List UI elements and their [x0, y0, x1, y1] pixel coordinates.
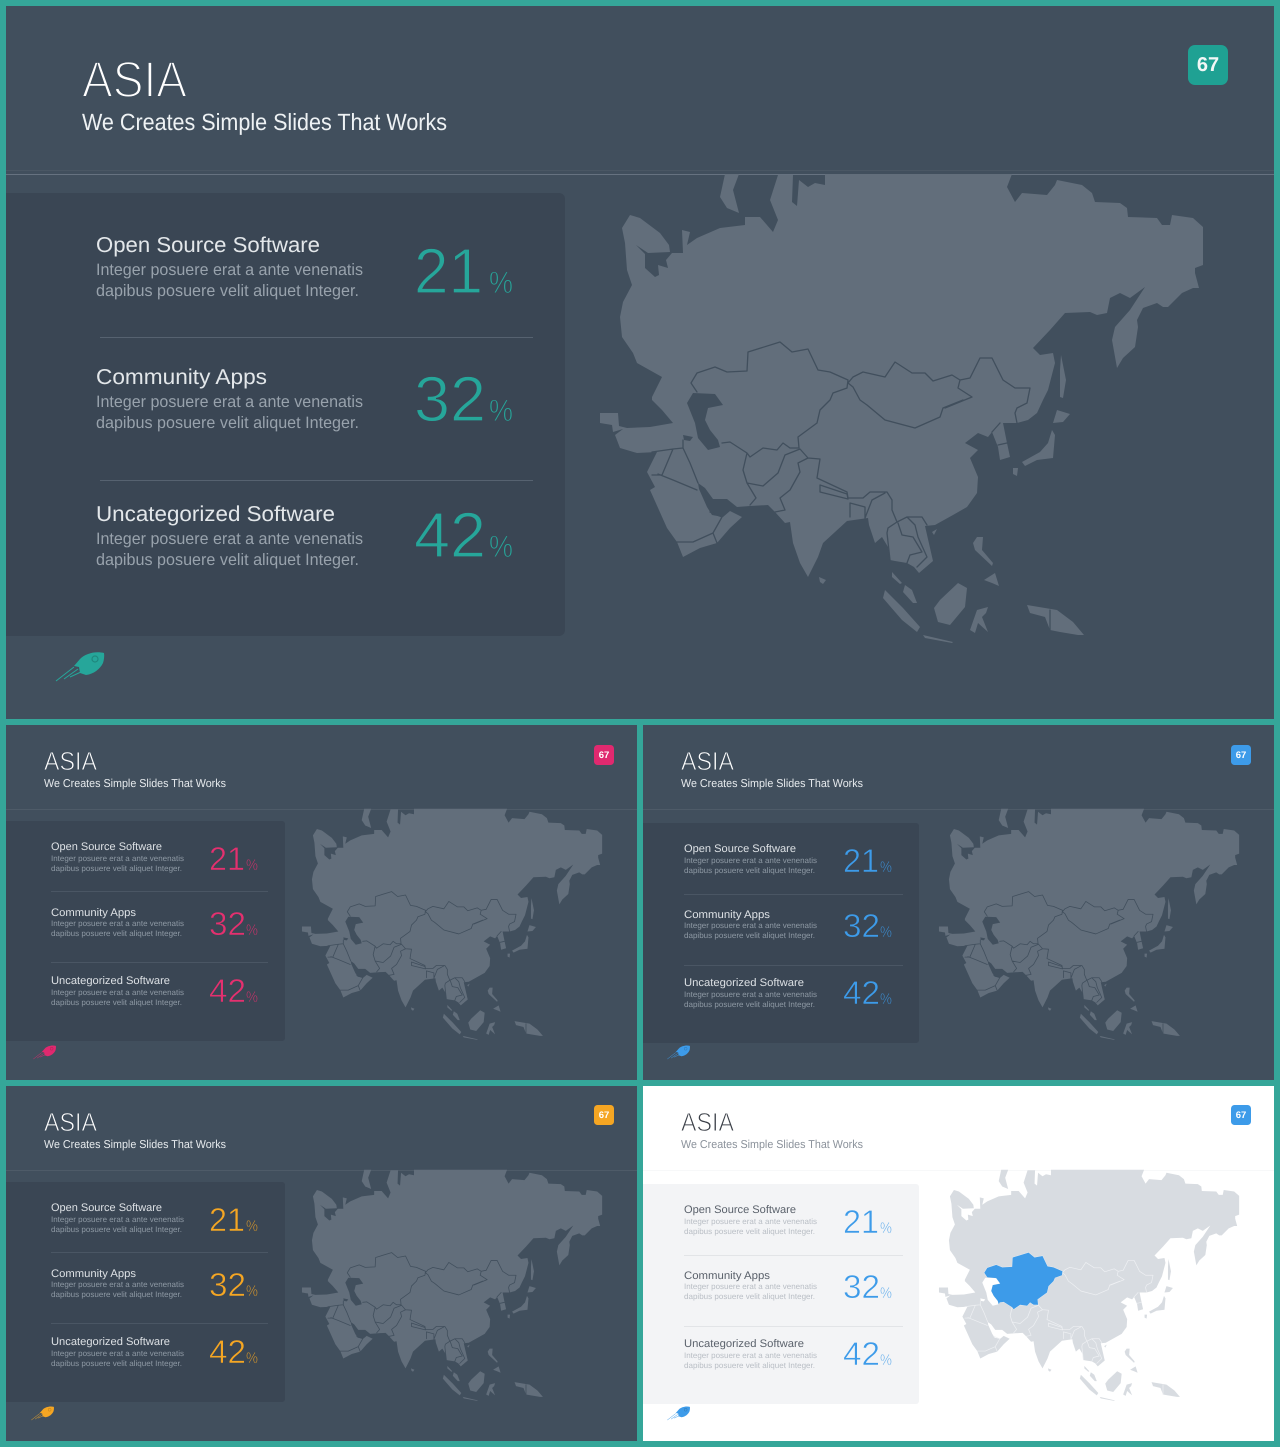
row: open source software — [96, 233, 513, 307]
row: uncategorized software: Uncategorized Software — [96, 502, 335, 526]
row: uncategorized software: 42 — [209, 972, 246, 1009]
row: open source software: % — [880, 859, 892, 876]
page number badge — [594, 745, 614, 765]
map of Asia — [600, 174, 1203, 643]
panel: statistics — [6, 193, 565, 636]
row: open source software: % — [489, 265, 513, 300]
row: uncategorized software: % — [489, 529, 513, 564]
row: community apps: % — [246, 922, 258, 939]
row: open source software — [51, 840, 258, 877]
slide: main teal background — [6, 6, 1274, 719]
slide: amber variant — [6, 1086, 637, 1441]
row: community apps: 32 — [843, 1268, 880, 1305]
row: community apps: % — [489, 393, 513, 428]
row: community apps: Community Apps — [51, 1268, 136, 1280]
row: open source software: Open Source Software — [684, 843, 796, 855]
row: uncategorized software: 42 — [843, 1335, 880, 1372]
row: uncategorized software: % — [246, 1350, 258, 1367]
row: community apps — [684, 907, 892, 944]
row: uncategorized software — [684, 1335, 892, 1372]
row: open source software: Integer posuere erat a ante venenatis — [684, 856, 817, 865]
row: uncategorized software: 42 — [843, 974, 880, 1011]
icon: rocket — [31, 1407, 54, 1420]
row: open source software: Integer posuere erat a ante venenatis — [51, 854, 184, 863]
row: open source software: Integer posuere erat a ante venenatis — [51, 1215, 184, 1224]
slide: light variant — [643, 1086, 1274, 1441]
row: open source software — [684, 1203, 892, 1240]
row: open source software: % — [246, 857, 258, 874]
row: community apps — [51, 905, 258, 942]
map of Asia with highlighted Central Asia — [939, 1170, 1239, 1401]
row: uncategorized software: Uncategorized Software — [51, 1336, 170, 1348]
row: uncategorized software: Uncategorized Software — [684, 1338, 804, 1350]
row: open source software: Integer posuere erat a ante venenatis — [96, 261, 363, 279]
row: uncategorized software: Uncategorized Software — [51, 975, 170, 987]
page number badge — [594, 1105, 614, 1125]
row: community apps: Community Apps — [684, 1270, 771, 1282]
row: open source software: dapibus posuere velit aliquet Integer. — [96, 282, 359, 300]
row: open source software: 21 — [843, 842, 879, 879]
row: uncategorized software: dapibus posuere velit aliquet Integer. — [96, 551, 359, 569]
map of Asia — [302, 809, 602, 1040]
row: uncategorized software: 42 — [209, 1333, 246, 1370]
row: community apps: % — [246, 1283, 258, 1300]
row: community apps: Integer posuere erat a ante venenatis — [96, 393, 363, 411]
subtitle: We Creates Simple Slides That Works — [82, 109, 447, 135]
highlighted region — [984, 1253, 1062, 1309]
row: uncategorized software: dapibus posuere velit aliquet Integer. — [51, 998, 182, 1007]
row: open source software: 21 — [209, 1201, 245, 1238]
row: community apps: Community Apps — [96, 365, 267, 389]
row: community apps — [51, 1266, 258, 1303]
title: ASIA — [681, 746, 735, 776]
subtitle: We Creates Simple Slides That Works — [681, 1139, 863, 1151]
row: open source software: % — [880, 1220, 892, 1237]
row: uncategorized software: dapibus posuere velit aliquet Integer. — [684, 1000, 815, 1009]
row: uncategorized software: dapibus posuere velit aliquet Integer. — [684, 1361, 815, 1370]
page number badge — [1188, 45, 1228, 85]
row: community apps: dapibus posuere velit aliquet Integer. — [684, 931, 815, 940]
page number badge: 67 — [1236, 1110, 1246, 1121]
row: uncategorized software: Uncategorized Software — [684, 977, 804, 989]
subtitle: We Creates Simple Slides That Works — [44, 1139, 226, 1151]
icon: rocket — [33, 1046, 56, 1059]
subtitle: We Creates Simple Slides That Works — [681, 778, 863, 790]
slide: blue variant — [643, 725, 1274, 1080]
row: community apps: dapibus posuere velit aliquet Integer. — [684, 1292, 815, 1301]
row: community apps: 32 — [414, 363, 486, 435]
row: open source software: dapibus posuere velit aliquet Integer. — [684, 866, 815, 875]
title: ASIA — [82, 51, 187, 108]
icon: rocket — [56, 652, 104, 681]
map of Asia — [302, 1170, 602, 1401]
row: open source software: Open Source Software — [684, 1204, 796, 1216]
row: uncategorized software: % — [246, 989, 258, 1006]
panel: statistics — [643, 823, 919, 1043]
row: community apps: Integer posuere erat a ante venenatis — [684, 1282, 817, 1291]
row: open source software: Open Source Software — [96, 233, 320, 257]
row: open source software: 21 — [209, 840, 245, 877]
row: uncategorized software: Integer posuere erat a ante venenatis — [96, 530, 363, 548]
row: uncategorized software: 42 — [414, 499, 486, 571]
row: community apps: dapibus posuere velit aliquet Integer. — [51, 1290, 182, 1299]
row: open source software — [684, 842, 892, 879]
row: open source software: Open Source Software — [51, 1202, 162, 1214]
icon: rocket — [667, 1407, 690, 1420]
row: uncategorized software — [96, 499, 513, 571]
row: open source software: dapibus posuere velit aliquet Integer. — [51, 1225, 182, 1234]
row: community apps: Community Apps — [684, 909, 771, 921]
row: community apps: dapibus posuere velit aliquet Integer. — [51, 929, 182, 938]
row: community apps: 32 — [209, 905, 246, 942]
row: uncategorized software: Integer posuere erat a ante venenatis — [684, 1351, 817, 1360]
row: community apps: % — [880, 1285, 892, 1302]
row: open source software: 21 — [414, 235, 483, 307]
page number badge — [1231, 745, 1251, 765]
row: community apps: Community Apps — [51, 907, 136, 919]
row: community apps: 32 — [209, 1266, 246, 1303]
subtitle: We Creates Simple Slides That Works — [44, 778, 226, 790]
row: uncategorized software — [684, 974, 892, 1011]
icon: rocket — [667, 1046, 690, 1059]
title: ASIA — [44, 746, 98, 776]
row: uncategorized software: dapibus posuere velit aliquet Integer. — [51, 1359, 182, 1368]
page number badge — [1231, 1105, 1251, 1125]
page number badge: 67 — [599, 1110, 609, 1121]
row: uncategorized software: Integer posuere erat a ante venenatis — [684, 990, 817, 999]
row: uncategorized software: % — [880, 1352, 892, 1369]
row: community apps — [96, 363, 513, 435]
row: uncategorized software: Integer posuere erat a ante venenatis — [51, 988, 184, 997]
slide: pink variant — [6, 725, 637, 1080]
row: community apps: Integer posuere erat a ante venenatis — [51, 919, 184, 928]
row: open source software: % — [246, 1218, 258, 1235]
row: community apps: % — [880, 924, 892, 941]
row: open source software: Integer posuere erat a ante venenatis — [684, 1217, 817, 1226]
panel: statistics — [6, 821, 285, 1041]
row: open source software: dapibus posuere velit aliquet Integer. — [684, 1227, 815, 1236]
row: uncategorized software — [51, 1333, 258, 1370]
row: community apps — [684, 1268, 892, 1305]
map of Asia — [939, 809, 1239, 1040]
row: uncategorized software — [51, 972, 258, 1009]
panel: statistics — [6, 1182, 285, 1402]
row: open source software — [51, 1201, 258, 1238]
row: community apps: dapibus posuere velit aliquet Integer. — [96, 414, 359, 432]
page number badge: 67 — [1197, 54, 1219, 76]
row: community apps: 32 — [843, 907, 880, 944]
row: open source software: 21 — [843, 1203, 879, 1240]
row: uncategorized software: Integer posuere erat a ante venenatis — [51, 1349, 184, 1358]
row: community apps: Integer posuere erat a ante venenatis — [51, 1280, 184, 1289]
panel: statistics — [643, 1184, 919, 1404]
row: community apps: Integer posuere erat a ante venenatis — [684, 921, 817, 930]
title: ASIA — [681, 1107, 735, 1137]
page number badge: 67 — [599, 750, 609, 761]
row: open source software: dapibus posuere velit aliquet Integer. — [51, 864, 182, 873]
title: ASIA — [44, 1107, 98, 1137]
row: open source software: Open Source Software — [51, 841, 162, 853]
page number badge: 67 — [1236, 750, 1246, 761]
row: uncategorized software: % — [880, 991, 892, 1008]
